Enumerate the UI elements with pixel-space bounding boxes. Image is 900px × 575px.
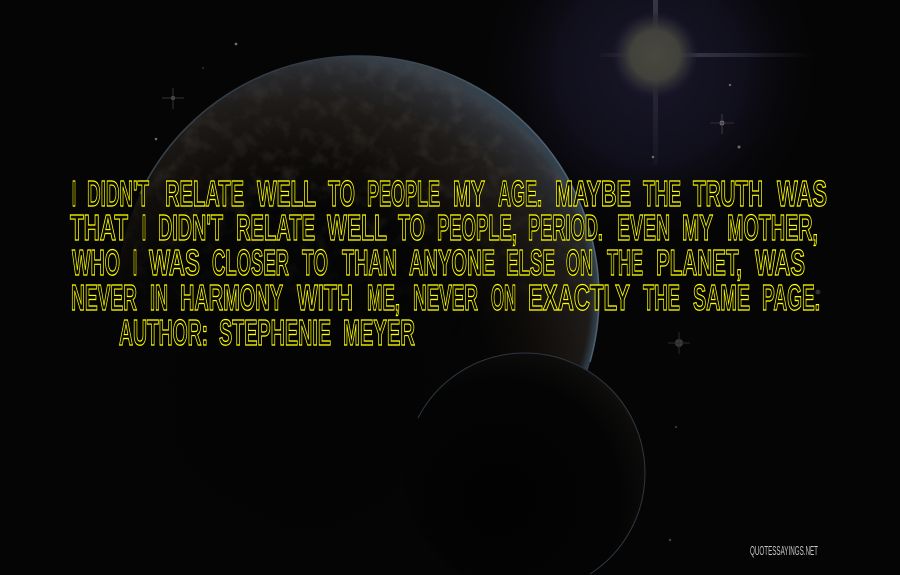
line 1: I xyxy=(72,173,76,214)
icon: bright star xyxy=(600,0,815,165)
line 2: MY xyxy=(682,207,713,248)
line 4: THE xyxy=(643,277,680,318)
line 3: I xyxy=(133,242,137,283)
line 3 xyxy=(72,242,805,283)
line 4: NEVER xyxy=(413,277,478,318)
line 3: THE xyxy=(607,242,643,283)
icon: large planet xyxy=(118,55,600,370)
line 1: RELATE xyxy=(165,173,244,214)
line 4: ME, xyxy=(367,277,400,318)
line 3: ELSE xyxy=(506,242,555,283)
quote text xyxy=(70,173,827,353)
line 1: TRUTH xyxy=(693,173,763,214)
line 3: ON xyxy=(566,242,593,283)
line 3: WHO xyxy=(72,242,120,283)
line 4: HARMONY xyxy=(180,277,283,318)
line 2 xyxy=(70,207,818,248)
line 2: PEOPLE, xyxy=(437,207,517,248)
line 1: THE xyxy=(643,173,681,214)
line 4: IN xyxy=(150,277,168,318)
line 4: EXACTLY xyxy=(528,277,630,318)
line 2: TO xyxy=(398,207,425,248)
line 1: AGE. xyxy=(498,173,542,214)
line 2: WELL xyxy=(327,207,387,248)
poster: QUOTESSAYINGS.NET xyxy=(750,543,818,558)
author line: AUTHOR: xyxy=(119,312,208,353)
line 4: SAME xyxy=(693,277,750,318)
line 1: TO xyxy=(328,173,355,214)
line 2: EVEN xyxy=(617,207,670,248)
line 4: PAGE. xyxy=(762,277,820,318)
line 3: ANYONE xyxy=(409,242,495,283)
line 3: CLOSER xyxy=(212,242,289,283)
line 4: WITH xyxy=(297,277,353,318)
line 1: MY xyxy=(453,173,485,214)
line 3: WAS xyxy=(149,242,200,283)
atmosphere band xyxy=(470,84,599,378)
line 3: WAS xyxy=(755,242,805,283)
line 1: DIDN'T xyxy=(87,173,149,214)
planet limb highlight xyxy=(140,56,599,362)
line 2: DIDN'T xyxy=(158,207,223,248)
line 2: RELATE xyxy=(236,207,315,248)
author line xyxy=(119,312,415,353)
line 4 xyxy=(71,277,820,318)
line 4: NEVER xyxy=(71,277,137,318)
line 1: PEOPLE xyxy=(367,173,440,214)
line 2: I xyxy=(142,207,146,248)
line 3: THAN xyxy=(342,242,397,283)
line 2: THAT xyxy=(70,207,128,248)
line 3: PLANET, xyxy=(656,242,742,283)
author line: MEYER xyxy=(343,312,415,353)
line 3: TO xyxy=(302,242,328,283)
line 1: WELL xyxy=(257,173,316,214)
icon: small stars xyxy=(155,43,820,541)
line 1: MAYBE xyxy=(555,173,631,214)
line 2: PERIOD. xyxy=(528,207,603,248)
author line: STEPHENIE xyxy=(219,312,331,353)
line 2: MOTHER, xyxy=(727,207,818,248)
icon: small planet xyxy=(405,353,645,575)
line 1: WAS xyxy=(777,173,827,214)
line 1 xyxy=(72,173,827,214)
nebula xyxy=(470,0,830,250)
line 4: ON xyxy=(491,277,516,318)
